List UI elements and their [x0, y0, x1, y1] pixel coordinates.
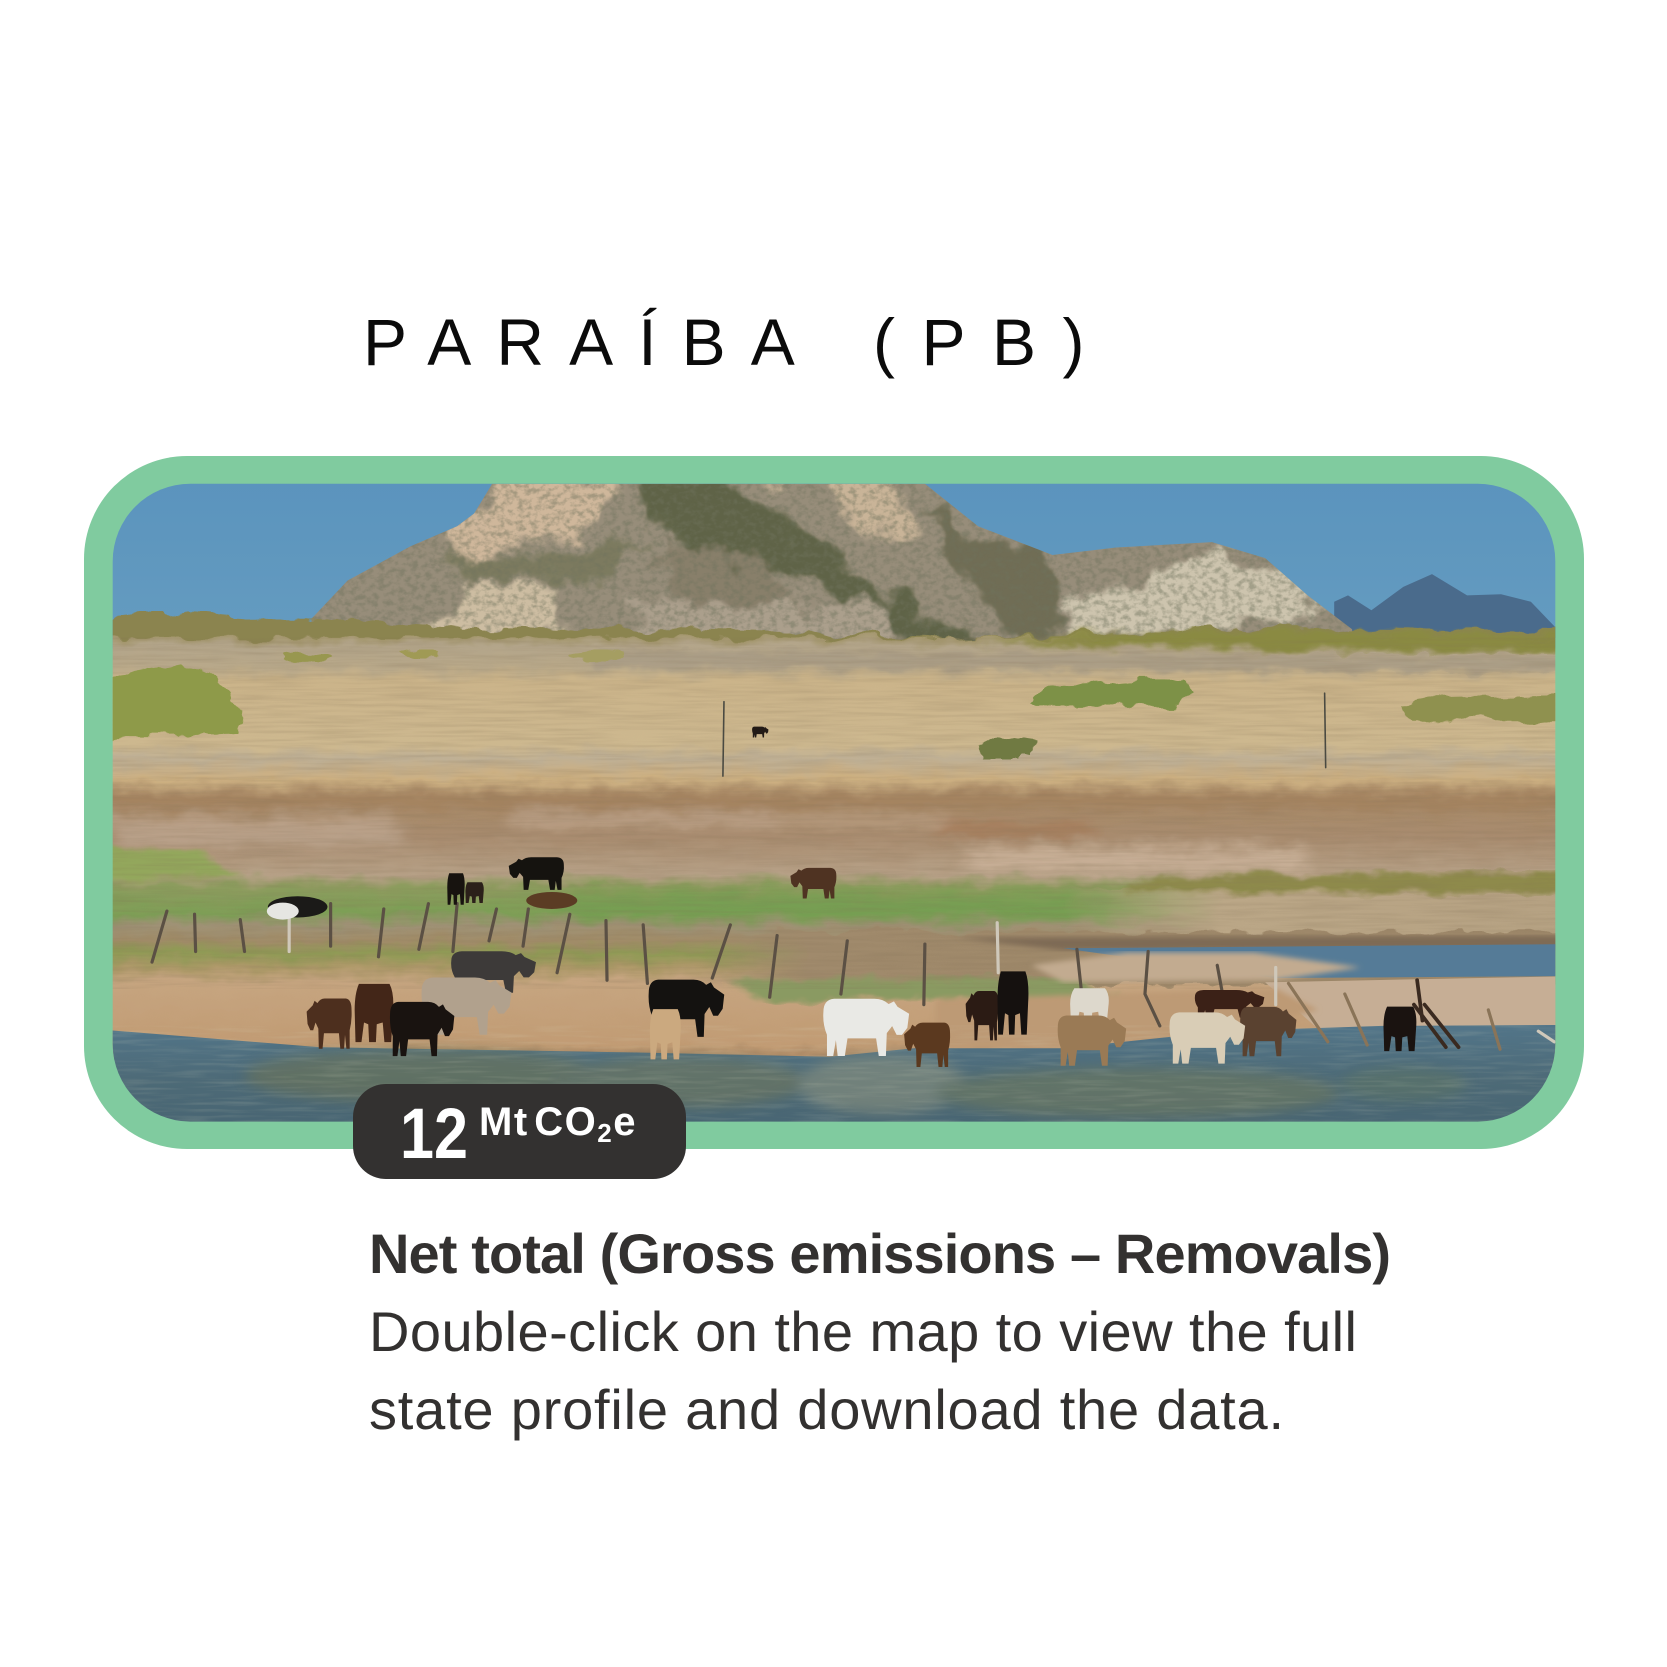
green frame: [84, 456, 1584, 1149]
grey strip far field: [595, 651, 1584, 672]
water reflections: [245, 1048, 1467, 1118]
green grass patch left: [112, 845, 240, 886]
title: (PB): [873, 305, 1111, 379]
instruction line 2: state profile and download the data.: [369, 1378, 1284, 1441]
bright green strip: [553, 891, 1169, 921]
unit: e: [613, 1100, 637, 1144]
dirt band without grass, right of the fence: [702, 931, 1595, 984]
heading: net total: Net total (Gross emissions – Removals): [369, 1222, 1391, 1285]
title: PARAÍBA: [363, 305, 820, 379]
field texture: [113, 638, 1555, 989]
red-brown strips: [85, 792, 1595, 870]
panel: photo card: [84, 456, 1595, 1149]
main rocky mountain: [312, 484, 1352, 642]
value: 12: [400, 1095, 468, 1174]
olive shrubs on right horizon: [978, 629, 1584, 653]
sand spit: [1031, 953, 1361, 982]
right-hand pool and dark bank: [957, 936, 1584, 950]
badge: net total value: [353, 1084, 686, 1179]
photo: cattle at the water with mountain behind: [85, 468, 1595, 1138]
instruction line 1: Double-click on the map to view the full: [369, 1300, 1357, 1363]
unit: Mt CO: [479, 1100, 597, 1144]
organic landscape layers: [85, 611, 1595, 1063]
description text: [369, 1222, 1391, 1441]
fence posts: [152, 693, 1554, 1049]
cattle at the waterline: [307, 951, 1416, 1067]
sky: [112, 484, 1556, 648]
distant blue mountain: [1334, 574, 1555, 638]
tan field on right lower: [1063, 889, 1595, 933]
water: [112, 1025, 1556, 1122]
unit: 2: [597, 1118, 613, 1148]
bushes: [96, 650, 1584, 759]
small green patch mid: [723, 976, 1127, 1001]
grass strip right: [1127, 872, 1584, 895]
far field cattle: [267, 727, 836, 920]
lower bank sand: [1265, 976, 1556, 1028]
infographic canvas: [84, 308, 1584, 1440]
treeline: [112, 611, 1556, 644]
landscape bands: [85, 638, 1595, 1063]
badge background: [353, 1084, 686, 1179]
